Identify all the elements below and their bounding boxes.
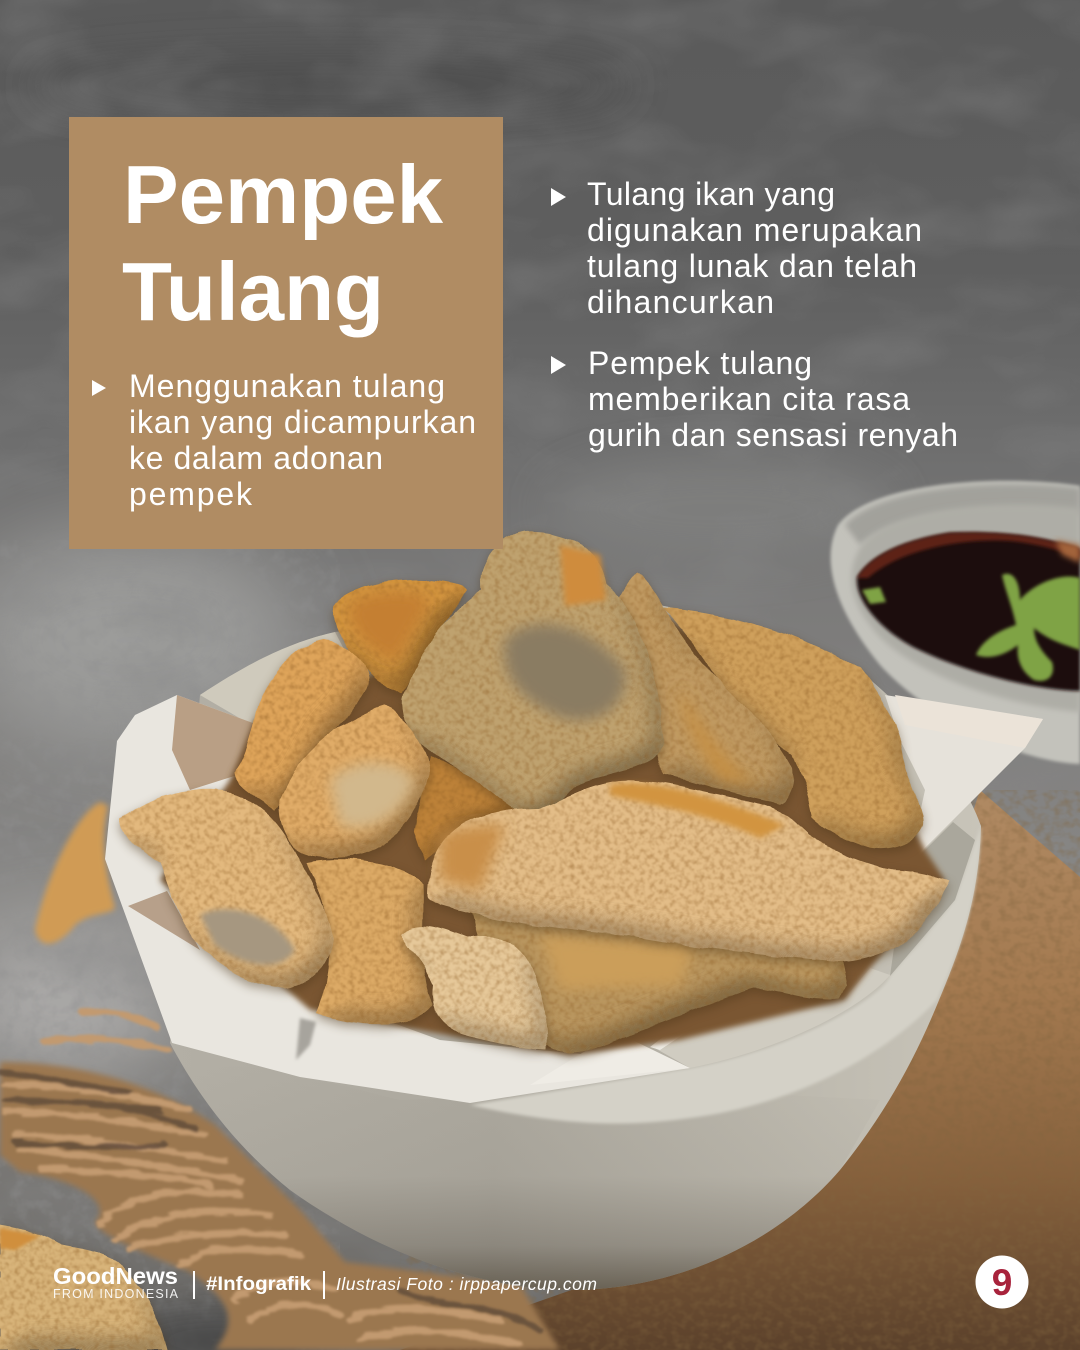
photo: food shading details — [200, 545, 785, 965]
photo: shadow under food — [160, 600, 945, 1055]
title: Pempek Tulang — [122, 148, 444, 338]
bullet text: Pempek tulang: gurih dan sensasi renyah — [588, 417, 958, 453]
photo: parchment paper liner — [105, 695, 1043, 1103]
piece: right long — [663, 608, 923, 849]
piece: top-left crust — [333, 579, 467, 695]
page number badge — [976, 1256, 1028, 1308]
text panel — [69, 117, 503, 549]
piece: thin light — [400, 926, 547, 1049]
bullet text: Tulang ikan: Tulang ikan yang — [587, 176, 835, 212]
bullet marker: first right item — [551, 188, 566, 206]
piece: triangular — [612, 573, 793, 804]
piece: centre grey-brown — [403, 531, 664, 818]
bullet text: Menggunakan tulang: Menggunakan tulang — [129, 368, 445, 404]
piece: small back — [415, 755, 520, 860]
bullet text: Menggunakan tulang: ke dalam adonan — [129, 440, 383, 476]
bullet text: Pempek tulang: Pempek tulang — [588, 345, 812, 381]
bullet text: Tulang ikan: dihancurkan — [587, 284, 774, 320]
footer divider — [193, 1271, 195, 1299]
photo: loose fried piece left — [35, 802, 115, 944]
piece: below long — [470, 905, 847, 1053]
title: Pempek Tulang: Pempek — [123, 148, 444, 241]
footer hashtag: #Infografik — [206, 1274, 311, 1295]
photo: burlap fringe — [0, 1012, 560, 1350]
bullet: panel marker — [92, 380, 106, 396]
footer photo credit: Ilustrasi Foto : irppapercup.com — [336, 1274, 597, 1294]
footer divider — [323, 1271, 325, 1299]
bullet marker: second right item — [551, 356, 566, 374]
footer logo: GoodNews from Indonesia: GoodNews — [53, 1263, 178, 1289]
footer logo: GoodNews from Indonesia: FROM INDONESIA — [53, 1287, 179, 1301]
bullet text: Menggunakan tulang: pempek — [129, 476, 253, 512]
photo: white bowl — [170, 596, 981, 1290]
piece: left with cut face — [120, 789, 333, 988]
bullet text: Menggunakan tulang: ikan yang dicampurkan — [129, 404, 476, 440]
bullet text: Pempek tulang: memberikan cita rasa — [588, 381, 910, 417]
bullet text: Menggunakan tulang — [129, 368, 476, 512]
title: Pempek Tulang: Tulang — [122, 245, 384, 338]
bullet text: Pempek tulang — [588, 345, 958, 453]
bullet text: Tulang ikan: digunakan merupakan — [587, 212, 922, 248]
page number badge: 9 — [992, 1262, 1012, 1303]
piece: lower middle — [307, 859, 433, 1024]
photo: fried pempek pieces — [120, 531, 950, 1053]
bullet text: Tulang ikan: tulang lunak dan telah — [587, 248, 917, 284]
photo: bottom-left pempek — [0, 1225, 167, 1350]
footer logo: GoodNews from Indonesia — [53, 1263, 179, 1301]
piece: round — [280, 706, 430, 858]
piece: drumstick — [233, 640, 369, 810]
piece: long big — [427, 780, 950, 962]
photo: burlap cloth — [400, 790, 1080, 1350]
bullet text: Tulang ikan — [587, 176, 922, 320]
photo: sauce dish — [831, 481, 1080, 764]
